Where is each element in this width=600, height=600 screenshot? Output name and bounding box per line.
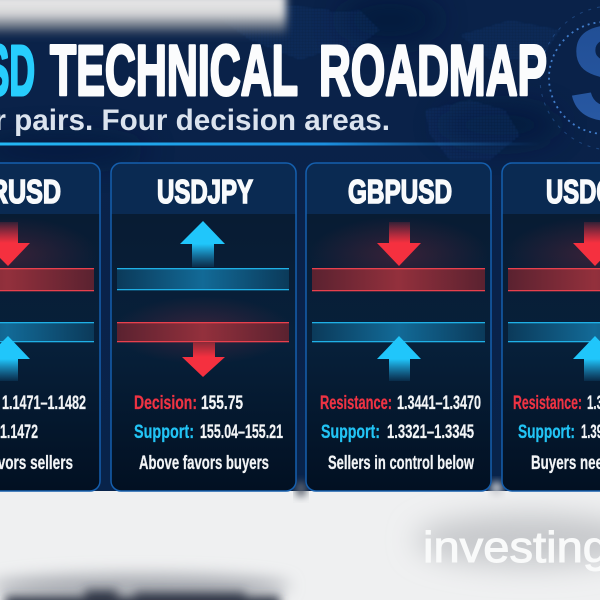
levels text [0,393,86,474]
resistance band [0,268,94,291]
icon: dollar sign emblem with dashed rings [540,0,600,150]
levels text: 1.1472 [0,422,38,443]
bottom white section [0,482,600,600]
levels text: 155.04–155.21 [200,422,283,443]
levels text: 1.3321–1.3345 [387,422,474,443]
levels text: Support: [321,422,380,443]
panel: USDCAD [502,163,600,491]
levels text [513,393,600,474]
icon: blue arrow up [377,336,421,381]
icon: blue arrow up [573,336,600,381]
heading: USDJPY [157,173,253,210]
levels text [134,393,283,474]
panel: GBPUSD [306,163,491,491]
levels text [320,393,481,474]
levels text: 1.1471–1.1482 [2,393,86,414]
levels text: Resistance: [320,393,392,414]
title: TECHNICAL [50,32,298,111]
panel: USDJPY [111,163,296,491]
panel: EURUSD [0,163,100,491]
red band [117,322,289,342]
logo: investing: investing [423,523,600,572]
levels text: Sellers in control below [328,453,474,474]
support band [0,322,94,342]
levels text: 155.75 [201,393,243,414]
world map dotted texture [210,5,560,160]
icon: red arrow down [182,342,225,377]
icon: red arrow down [0,222,30,266]
levels text: Support: [134,422,194,443]
levels text: 1.3441–1.3470 [397,393,481,414]
icon: red arrow down [573,222,600,266]
levels text: Above favors buyers [139,453,269,474]
icon: blue arrow up [0,336,30,381]
icon: blue arrow up [180,221,225,267]
support band [508,322,600,342]
heading: GBPUSD [348,173,452,210]
resistance band [508,268,600,291]
support band [312,322,485,342]
top cloud [0,0,286,38]
accent rule [0,142,540,146]
icon: red arrow down [377,222,421,266]
levels text: Decision: [134,393,197,414]
blue band [117,268,289,290]
levels text: Support: [518,422,575,443]
resistance band [312,268,485,291]
